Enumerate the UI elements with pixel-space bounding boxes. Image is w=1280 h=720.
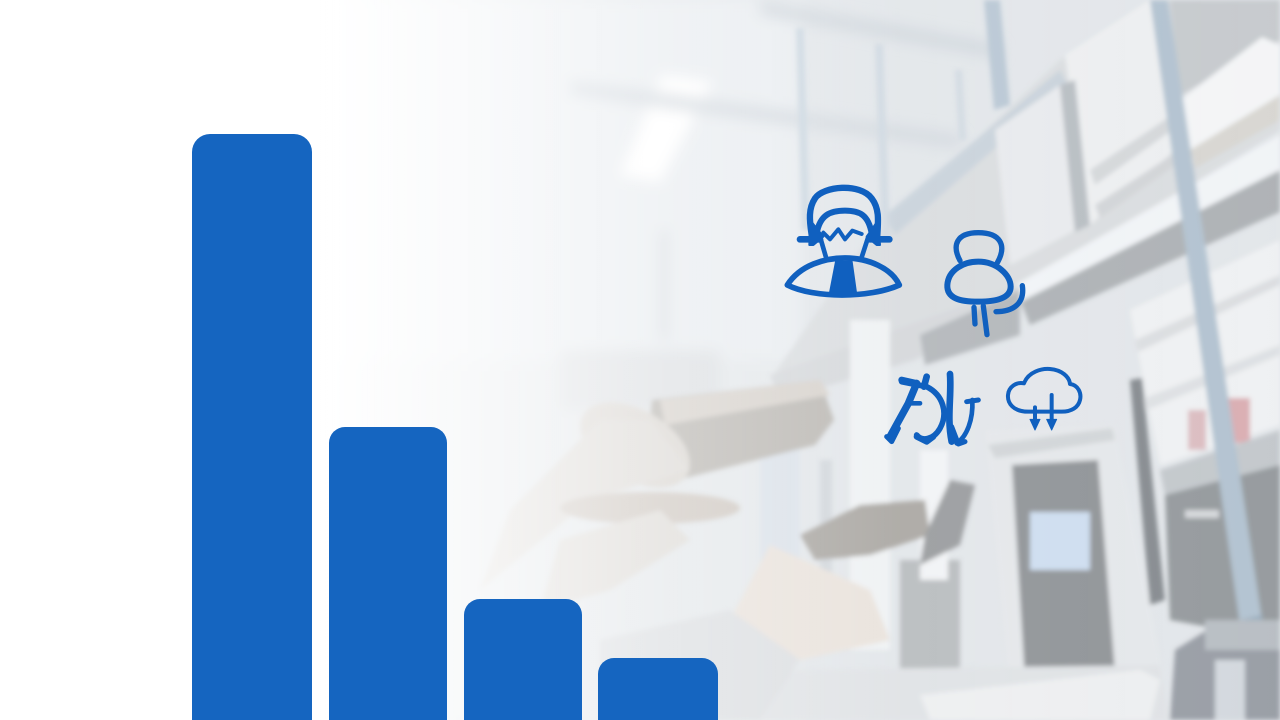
forklift lower right <box>1170 625 1280 720</box>
middle columns <box>850 320 890 650</box>
bar chart <box>192 134 718 720</box>
icon: worker with headset <box>787 188 899 295</box>
lower shelves and boxes <box>1130 240 1280 465</box>
bar 1 <box>192 134 312 720</box>
icon: cloud with download arrows <box>1008 369 1080 430</box>
bar 2 <box>329 427 447 720</box>
bar 3 <box>464 599 582 720</box>
bar 4 <box>598 658 718 720</box>
upright posts <box>984 0 1010 110</box>
upper shelves <box>770 0 1280 380</box>
icon group <box>787 188 1080 444</box>
icon: tangled arrows <box>887 374 978 444</box>
scanners and hands <box>645 380 834 482</box>
machine column <box>985 425 1165 700</box>
floor <box>760 665 1170 720</box>
icon: person with motion lines <box>947 233 1023 335</box>
shelf beam and underside <box>1020 170 1280 325</box>
